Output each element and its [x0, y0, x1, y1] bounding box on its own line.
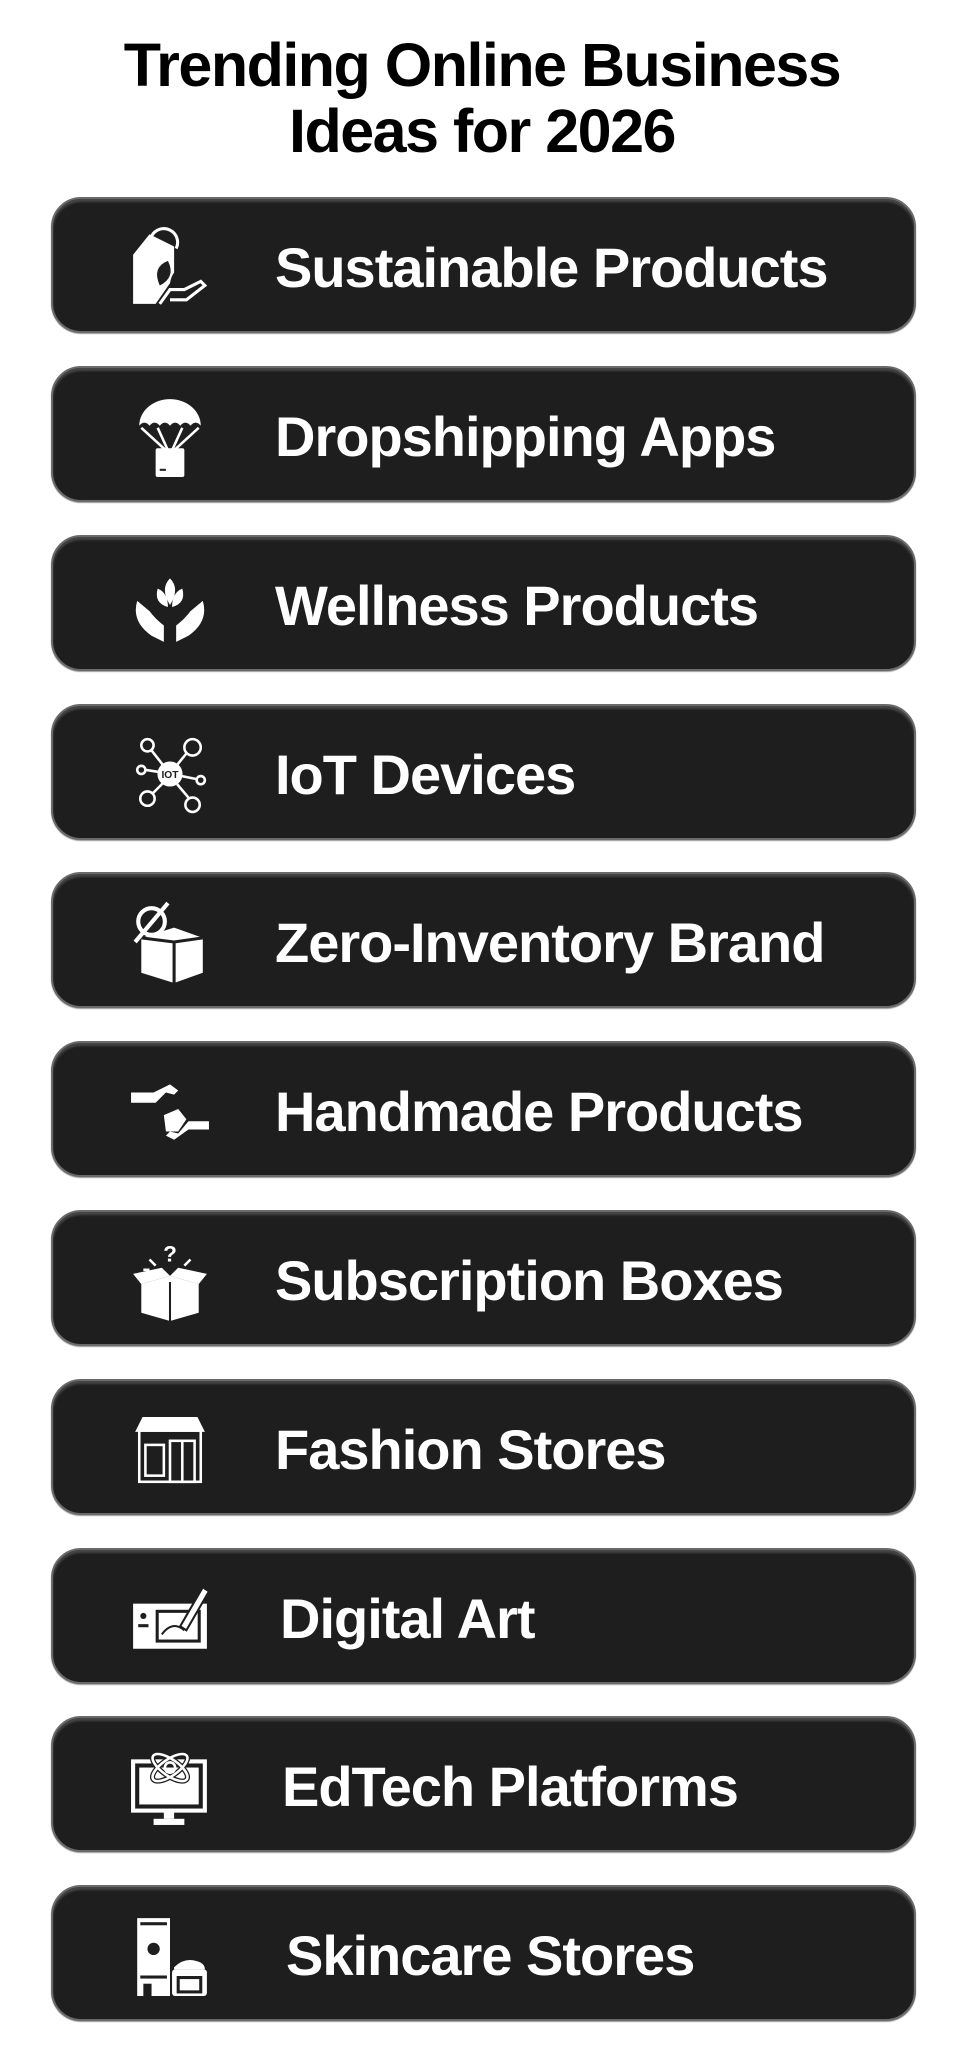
- icon: iot network: [136, 738, 206, 814]
- label: Handmade Products: [275, 1080, 803, 1143]
- icon: hands passing item: [131, 1084, 209, 1140]
- icon: parachute box: [139, 399, 201, 477]
- label: Zero-Inventory Brand: [275, 911, 824, 974]
- label: Sustainable Products: [275, 236, 828, 299]
- title: Trending Online Business: [124, 31, 840, 99]
- panel: handmade products: [51, 1041, 916, 1177]
- label: Subscription Boxes: [275, 1249, 783, 1312]
- icon: eco tag with leaf in hand: [133, 227, 208, 305]
- title: [124, 31, 840, 165]
- label: Wellness Products: [275, 574, 758, 637]
- label: Dropshipping Apps: [275, 405, 775, 468]
- icon: storefront: [135, 1417, 205, 1484]
- label: EdTech Platforms: [282, 1755, 738, 1818]
- icon: box with zero symbol: [134, 902, 203, 982]
- panel: skincare stores: [51, 1885, 916, 2021]
- icon: open box with question mark: [133, 1242, 207, 1321]
- icon: drawing tablet with pen: [133, 1588, 208, 1649]
- label: Skincare Stores: [286, 1924, 694, 1987]
- label: IoT Devices: [275, 743, 575, 806]
- title: Ideas for 2026: [289, 97, 675, 165]
- panel: edtech platforms: [51, 1716, 916, 1852]
- label: Digital Art: [280, 1587, 534, 1650]
- panel: iot devices: [51, 704, 916, 840]
- panel: subscription boxes: [51, 1210, 916, 1346]
- panel: digital art: [51, 1548, 916, 1684]
- icon: tube and jar: [137, 1918, 207, 1996]
- label: Fashion Stores: [275, 1418, 666, 1481]
- panel: wellness products: [51, 535, 916, 671]
- panel: fashion stores: [51, 1379, 916, 1515]
- panel: sustainable products: [51, 197, 916, 333]
- icon: monitor with atom: [131, 1752, 207, 1825]
- icon: open box with question mark: ?: [163, 1242, 177, 1267]
- panel: dropshipping apps: [51, 366, 916, 502]
- panel: zero-inventory brand: [51, 872, 916, 1008]
- icon: iot network: IOT: [161, 770, 179, 781]
- icon: hands with lotus: [136, 578, 204, 642]
